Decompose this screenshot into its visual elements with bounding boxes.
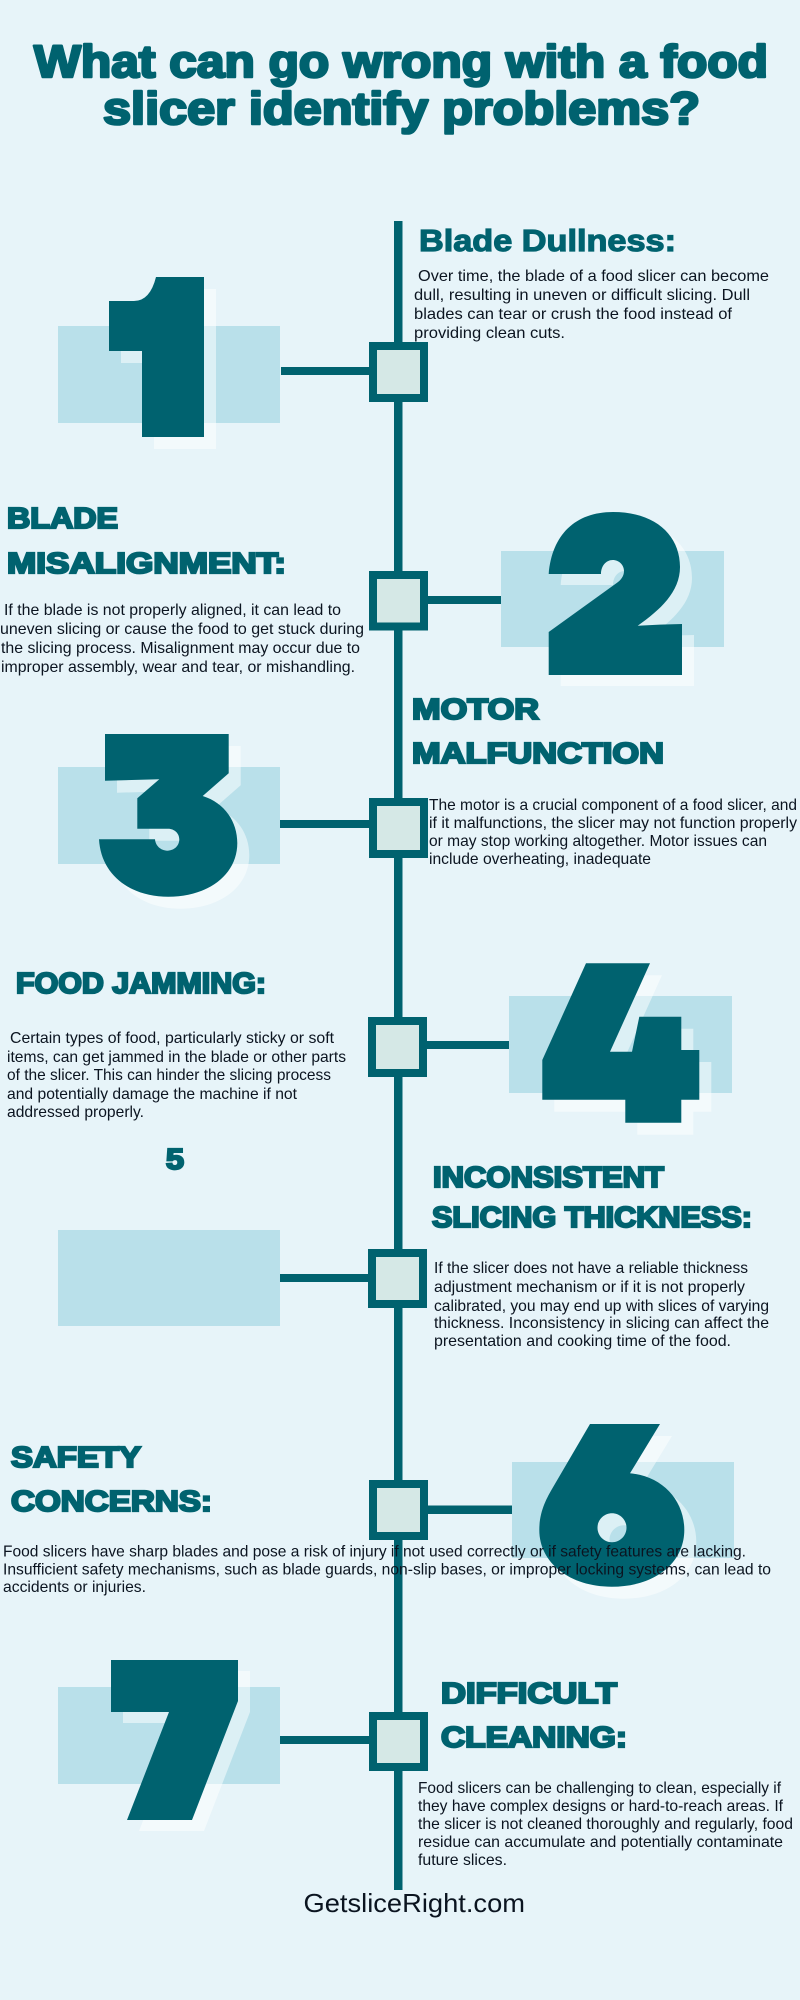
heading: inconsistent slicing thickness: INCONSISTENT xyxy=(433,1162,664,1194)
heading: blade misalignment: BLADE xyxy=(7,503,118,535)
connector 4 xyxy=(427,1041,509,1049)
text block: inconsistent slicing thickness xyxy=(432,1162,769,1350)
body: blade misalignment: the slicing process. Misalignment may occur due to xyxy=(1,640,360,657)
body: difficult cleaning: they have complex designs or hard-to-reach areas. If xyxy=(418,1798,784,1815)
heading: blade misalignment: MISALIGNMENT: xyxy=(7,548,286,580)
body: motor malfunction: or may stop working altogether. Motor issues can xyxy=(429,833,767,850)
body: blade dullness: dull, resulting in uneven or difficult slicing. Dull xyxy=(414,287,750,304)
body: difficult cleaning: future slices. xyxy=(418,1852,507,1869)
heading: difficult cleaning: CLEANING: xyxy=(441,1722,627,1754)
heading: safety concerns: SAFETY xyxy=(11,1442,141,1474)
body: motor malfunction: The motor is a crucial component of a food slicer, and xyxy=(429,797,797,814)
body: food jamming xyxy=(7,1030,346,1121)
heading: motor malfunction xyxy=(412,694,664,770)
body: inconsistent slicing thickness xyxy=(434,1260,769,1350)
connector 5 xyxy=(280,1274,368,1282)
panel: number 4 xyxy=(509,963,732,1135)
connector 2 xyxy=(428,596,501,604)
connector 7 xyxy=(280,1736,369,1744)
node 5 xyxy=(372,1253,423,1304)
heading: safety concerns: CONCERNS: xyxy=(11,1486,212,1518)
title: slicer identify problems? xyxy=(103,83,700,134)
panel: number 7 xyxy=(58,1660,280,1831)
node 4 xyxy=(372,1021,423,1073)
body: safety concerns: Food slicers have sharp blades and pose a risk of injury if not used correctly or if safety features are lacking. xyxy=(3,1544,746,1560)
text block: motor malfunction xyxy=(412,694,797,868)
connector 3 xyxy=(280,820,369,828)
heading: difficult cleaning: DIFFICULT xyxy=(441,1678,617,1710)
body: inconsistent slicing thickness: presentation and cooking time of the food. xyxy=(434,1333,731,1350)
node 2 xyxy=(373,575,424,626)
panel: number 3 xyxy=(58,734,280,909)
footer: website: GetsliceRight.com xyxy=(304,1888,525,1918)
body: safety concerns xyxy=(3,1544,771,1596)
title xyxy=(34,36,768,134)
body: difficult cleaning: the slicer is not cleaned thoroughly and regularly, food xyxy=(418,1816,793,1833)
text block: food jamming xyxy=(7,968,346,1121)
body: food jamming: Certain types of food, particularly sticky or soft xyxy=(10,1030,335,1047)
body: motor malfunction xyxy=(429,797,797,868)
heading: food jamming: FOOD JAMMING: xyxy=(16,968,266,1000)
body: inconsistent slicing thickness: If the slicer does not have a reliable thickness xyxy=(434,1260,748,1277)
body: blade misalignment xyxy=(0,602,364,676)
heading: inconsistent slicing thickness: SLICING THICKNESS: xyxy=(432,1202,752,1234)
heading: inconsistent slicing thickness xyxy=(432,1162,752,1234)
body: blade dullness: blades can tear or crush the food instead of xyxy=(414,306,733,323)
heading: blade misalignment xyxy=(7,503,286,580)
body: inconsistent slicing thickness: adjustment mechanism or if it is not properly xyxy=(434,1279,745,1296)
text block: blade dullness xyxy=(414,223,769,342)
body: blade dullness: Over time, the blade of a food slicer can become xyxy=(418,268,769,285)
panel: number 5 block xyxy=(58,1230,280,1326)
body: inconsistent slicing thickness: calibrated, you may end up with slices of varying xyxy=(434,1298,769,1315)
body: safety concerns: Insufficient safety mechanisms, such as blade guards, non-slip bases, or improper locking systems, can lead to xyxy=(3,1562,771,1578)
node 6 xyxy=(373,1484,424,1536)
title: What can go wrong with a food xyxy=(34,36,768,87)
heading: motor malfunction: MOTOR xyxy=(412,694,539,726)
number 5: 5 xyxy=(166,1144,184,1176)
panel: number 6 xyxy=(512,1424,734,1599)
timeline spine xyxy=(394,221,402,1890)
connector 1 xyxy=(281,367,369,375)
node 1 xyxy=(373,346,424,398)
body: blade dullness xyxy=(414,268,769,342)
heading: motor malfunction: MALFUNCTION xyxy=(412,738,664,770)
body: difficult cleaning: Food slicers can be challenging to clean, especially if xyxy=(418,1780,782,1797)
text block: safety concerns xyxy=(3,1442,771,1596)
panel: number 2 xyxy=(501,512,724,686)
heading: blade dullness: Blade Dullness: xyxy=(419,223,676,258)
body: food jamming: of the slicer. This can hinder the slicing process xyxy=(7,1067,331,1084)
body: food jamming: items, can get jammed in the blade or other parts xyxy=(7,1049,346,1066)
node 3 xyxy=(373,802,424,854)
connector 6 xyxy=(428,1506,512,1514)
body: blade dullness: providing clean cuts. xyxy=(414,325,565,342)
text block: blade misalignment xyxy=(0,503,364,676)
heading: safety concerns xyxy=(11,1442,212,1518)
body: motor malfunction: if it malfunctions, the slicer may not function properly xyxy=(429,815,797,832)
body: inconsistent slicing thickness: thickness. Inconsistency in slicing can affect the xyxy=(434,1315,769,1332)
body: safety concerns: accidents or injuries. xyxy=(3,1579,146,1596)
text block: difficult cleaning xyxy=(418,1678,793,1869)
body: food jamming: and potentially damage the machine if not xyxy=(7,1086,298,1103)
body: motor malfunction: include overheating, inadequate xyxy=(429,851,651,868)
body: food jamming: addressed properly. xyxy=(7,1104,144,1121)
panel: number 1 xyxy=(58,277,280,449)
body: difficult cleaning xyxy=(418,1780,793,1869)
body: blade misalignment: If the blade is not properly aligned, it can lead to xyxy=(4,602,341,619)
body: blade misalignment: improper assembly, wear and tear, or mishandling. xyxy=(1,659,355,676)
body: difficult cleaning: residue can accumulate and potentially contaminate xyxy=(418,1834,783,1851)
body: blade misalignment: uneven slicing or cause the food to get stuck during xyxy=(0,621,364,638)
node 7 xyxy=(373,1716,424,1767)
heading: difficult cleaning xyxy=(441,1678,627,1754)
